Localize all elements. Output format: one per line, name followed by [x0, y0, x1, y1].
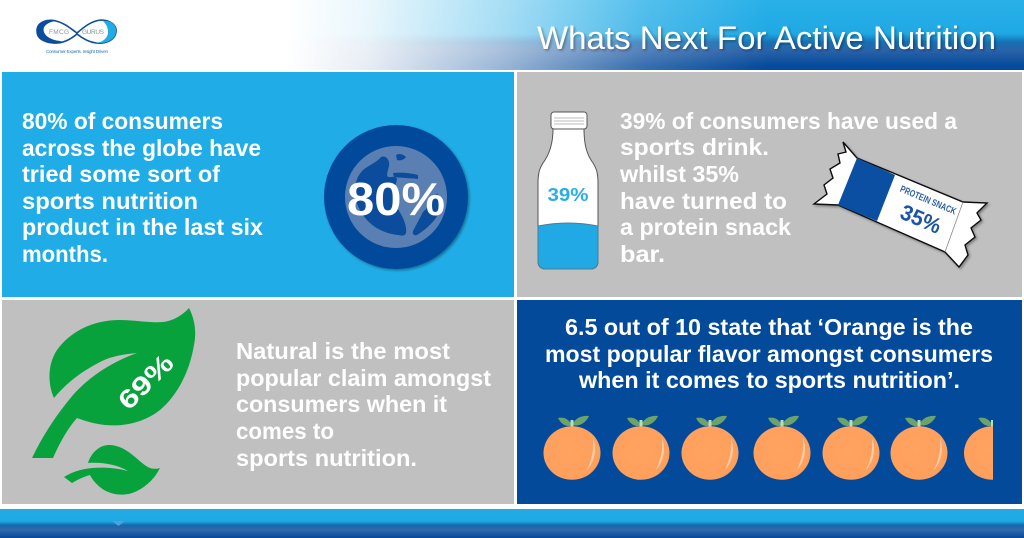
logo: FMCG Gurus: Consumer Experts. Insight Driven — [46, 49, 108, 54]
icon: large leaf 69% — [32, 308, 195, 458]
icon: globe badge: 80% — [347, 173, 445, 225]
icon: protein snack bar — [814, 142, 987, 267]
text: sports drink statement: bar. — [620, 241, 665, 267]
icon: large leaf 69%: 69% — [112, 348, 180, 416]
logo: FMCG Gurus — [37, 20, 116, 54]
text: 80% statement: tried some sort of — [22, 161, 220, 187]
text: natural claim statement — [236, 338, 491, 471]
text: sports drink statement — [619, 108, 957, 267]
footer band — [0, 509, 1024, 538]
icon: protein snack bar: 35% — [897, 199, 945, 239]
panel: natural claim — [2, 300, 514, 504]
logo: FMCG Gurus: FMCG — [49, 29, 69, 36]
icon: bottle 39% — [538, 112, 598, 269]
text: 80% statement — [22, 108, 263, 267]
icon: protein snack bar: PROTEIN SNACK — [898, 184, 958, 218]
text: orange statement — [545, 314, 993, 393]
panel: 80% of consumers — [2, 72, 514, 297]
text: natural claim statement: popular claim amongst — [236, 365, 491, 391]
icon: bottle 39%: 39% — [548, 185, 588, 205]
text: sports drink statement: 39% of consumers have used a — [620, 108, 957, 134]
icon row: 6.5 oranges — [544, 416, 1021, 480]
text: orange statement: most popular flavor amongst consumers — [545, 341, 993, 367]
text: sports drink statement: a protein snack — [620, 214, 791, 240]
text: 80% statement: across the globe have — [22, 135, 261, 161]
icon: globe badge — [324, 125, 468, 269]
panel: sports drink and protein bar — [517, 72, 1022, 297]
text: sports drink statement: whilst 35% — [619, 161, 739, 187]
text: 80% statement: months. — [22, 241, 108, 267]
icon: small leaf — [64, 445, 160, 495]
logo: FMCG Gurus: GURUS — [82, 29, 105, 36]
text: sports drink statement: have turned to — [620, 188, 787, 214]
text: 80% statement: 80% of consumers — [22, 108, 223, 134]
title: Whats Next For Active Nutrition — [537, 20, 996, 56]
text: natural claim statement: sports nutrition. — [236, 445, 417, 471]
text: 80% statement: product in the last six — [22, 214, 263, 240]
text: natural claim statement: consumers when it — [236, 391, 447, 417]
text: natural claim statement: Natural is the most — [236, 338, 450, 364]
text: orange statement: when it comes to sports nutrition’. — [578, 367, 960, 393]
text: orange statement: 6.5 out of 10 state that ‘Orange is the — [565, 314, 973, 340]
text: 80% statement: sports nutrition — [22, 188, 198, 214]
panel: orange flavor — [517, 300, 1022, 504]
text: sports drink statement: sports drink. — [620, 134, 769, 160]
text: natural claim statement: comes to — [236, 418, 334, 444]
header band — [0, 0, 1024, 70]
